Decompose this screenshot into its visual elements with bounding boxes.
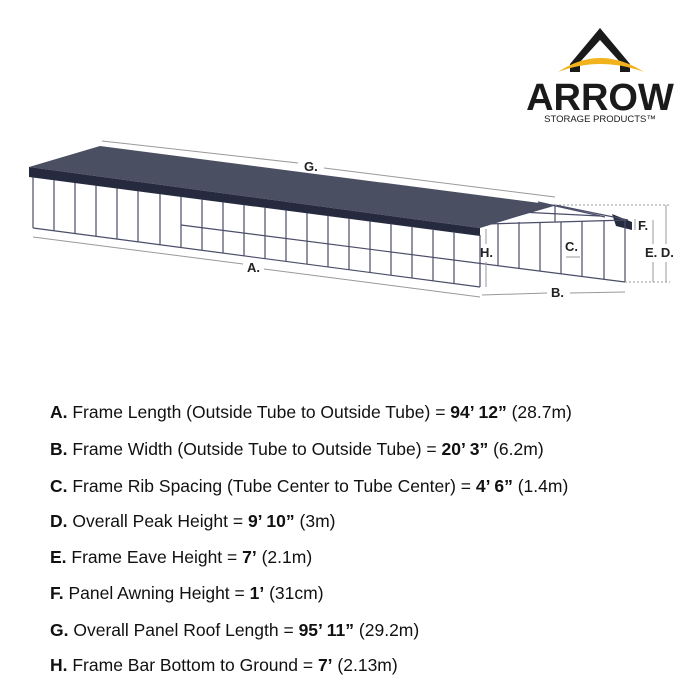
frame walls <box>33 178 628 287</box>
spec B: B. Frame Width (Outside Tube to Outside Tube) = 20’ 3” (6.2m) <box>50 439 544 459</box>
label C: C. <box>565 239 578 254</box>
spec A: A. Frame Length (Outside Tube to Outside Tube) = 94’ 12” (28.7m) <box>50 402 572 422</box>
spec F: F. Panel Awning Height = 1’ (31cm) <box>50 583 324 603</box>
dimension lines <box>33 141 670 297</box>
icon: house roof <box>558 28 644 72</box>
spec H: H. Frame Bar Bottom to Ground = 7’ (2.13m) <box>50 655 398 675</box>
spec C: C. Frame Rib Spacing (Tube Center to Tube Center) = 4’ 6” (1.4m) <box>50 476 568 496</box>
label E D: E. D. <box>645 245 674 260</box>
logo wordmark: ARROW <box>526 77 674 119</box>
label A: A. <box>247 260 260 275</box>
roof <box>29 146 632 236</box>
logo: Arrow Storage Products <box>526 28 674 125</box>
label H: H. <box>480 245 493 260</box>
spec E: E. Frame Eave Height = 7’ (2.1m) <box>50 547 312 567</box>
spec G: G. Overall Panel Roof Length = 95’ 11” (29.2m) <box>50 620 419 640</box>
label G: G. <box>304 159 318 174</box>
label B: B. <box>551 285 564 300</box>
logo tagline: STORAGE PRODUCTS™ <box>544 114 656 125</box>
diagram: carport <box>29 140 674 300</box>
label F: F. <box>638 218 648 233</box>
spec D: D. Overall Peak Height = 9’ 10” (3m) <box>50 511 335 531</box>
